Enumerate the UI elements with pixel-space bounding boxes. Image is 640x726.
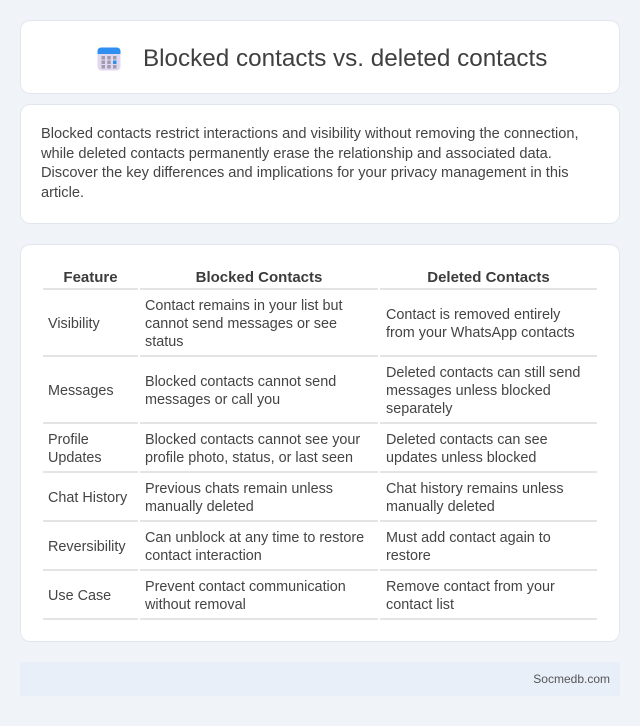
- column heading: feature: Feature: [63, 269, 118, 286]
- row: chat history: Chat History: [48, 490, 127, 506]
- title card: [20, 20, 620, 94]
- table card: [20, 244, 620, 642]
- intro text: [41, 126, 579, 200]
- row: use case: Use Case: [48, 588, 111, 604]
- intro card: [20, 104, 620, 224]
- intro text: Discover the key differences and implications for your privacy management in this: [41, 165, 569, 181]
- comparison table: contact interaction: [145, 548, 262, 564]
- icon: calendar: [98, 48, 120, 70]
- comparison table: Contact is removed entirely: [386, 307, 560, 323]
- row: messages: Messages: [48, 383, 114, 399]
- row: profile updates: Profile: [48, 432, 89, 448]
- intro text: article.: [41, 184, 84, 200]
- comparison table: Must add contact again to: [386, 530, 551, 546]
- comparison table: Previous chats remain unless: [145, 481, 333, 497]
- footer bar: [20, 662, 620, 696]
- comparison table: Remove contact from your: [386, 579, 555, 595]
- column heading: deleted contacts: Deleted Contacts: [427, 269, 550, 286]
- comparison table: without removal: [145, 597, 246, 613]
- column heading: blocked contacts: Blocked Contacts: [196, 269, 322, 286]
- intro text: Blocked contacts restrict interactions and visibility without removing the connection,: [41, 126, 579, 142]
- comparison table: profile photo, status, or last seen: [145, 450, 353, 466]
- row: profile updates: [48, 432, 102, 466]
- intro text: while deleted contacts permanently erase the relationship and associated data.: [41, 146, 552, 162]
- row: profile updates: Updates: [48, 450, 102, 466]
- footer credit: Socmedb.com: [533, 672, 610, 686]
- comparison table: manually deleted: [386, 499, 495, 515]
- comparison table: cannot send messages or see: [145, 316, 337, 332]
- comparison table: Blocked contacts cannot see your: [145, 432, 360, 448]
- comparison table: messages or call you: [145, 392, 280, 408]
- comparison table: Contact remains in your list but: [145, 298, 343, 314]
- row: visibility: Visibility: [48, 316, 100, 332]
- comparison table: Prevent contact communication: [145, 579, 346, 595]
- comparison table: from your WhatsApp contacts: [386, 325, 575, 341]
- comparison table: status: [145, 334, 183, 350]
- title: Blocked contacts vs. deleted contacts: [143, 45, 547, 72]
- comparison table: manually deleted: [145, 499, 254, 515]
- comparison table: Can unblock at any time to restore: [145, 530, 364, 546]
- comparison table: contact list: [386, 597, 454, 613]
- comparison table: restore: [386, 548, 431, 564]
- comparison table: updates unless blocked: [386, 450, 536, 466]
- comparison table: Blocked contacts cannot send: [145, 374, 336, 390]
- comparison table: separately: [386, 401, 452, 417]
- comparison table: messages unless blocked: [386, 383, 551, 399]
- comparison table: Chat history remains unless: [386, 481, 564, 497]
- row: reversibility: Reversibility: [48, 539, 126, 555]
- comparison table: Deleted contacts can still send: [386, 365, 580, 381]
- comparison table: Deleted contacts can see: [386, 432, 548, 448]
